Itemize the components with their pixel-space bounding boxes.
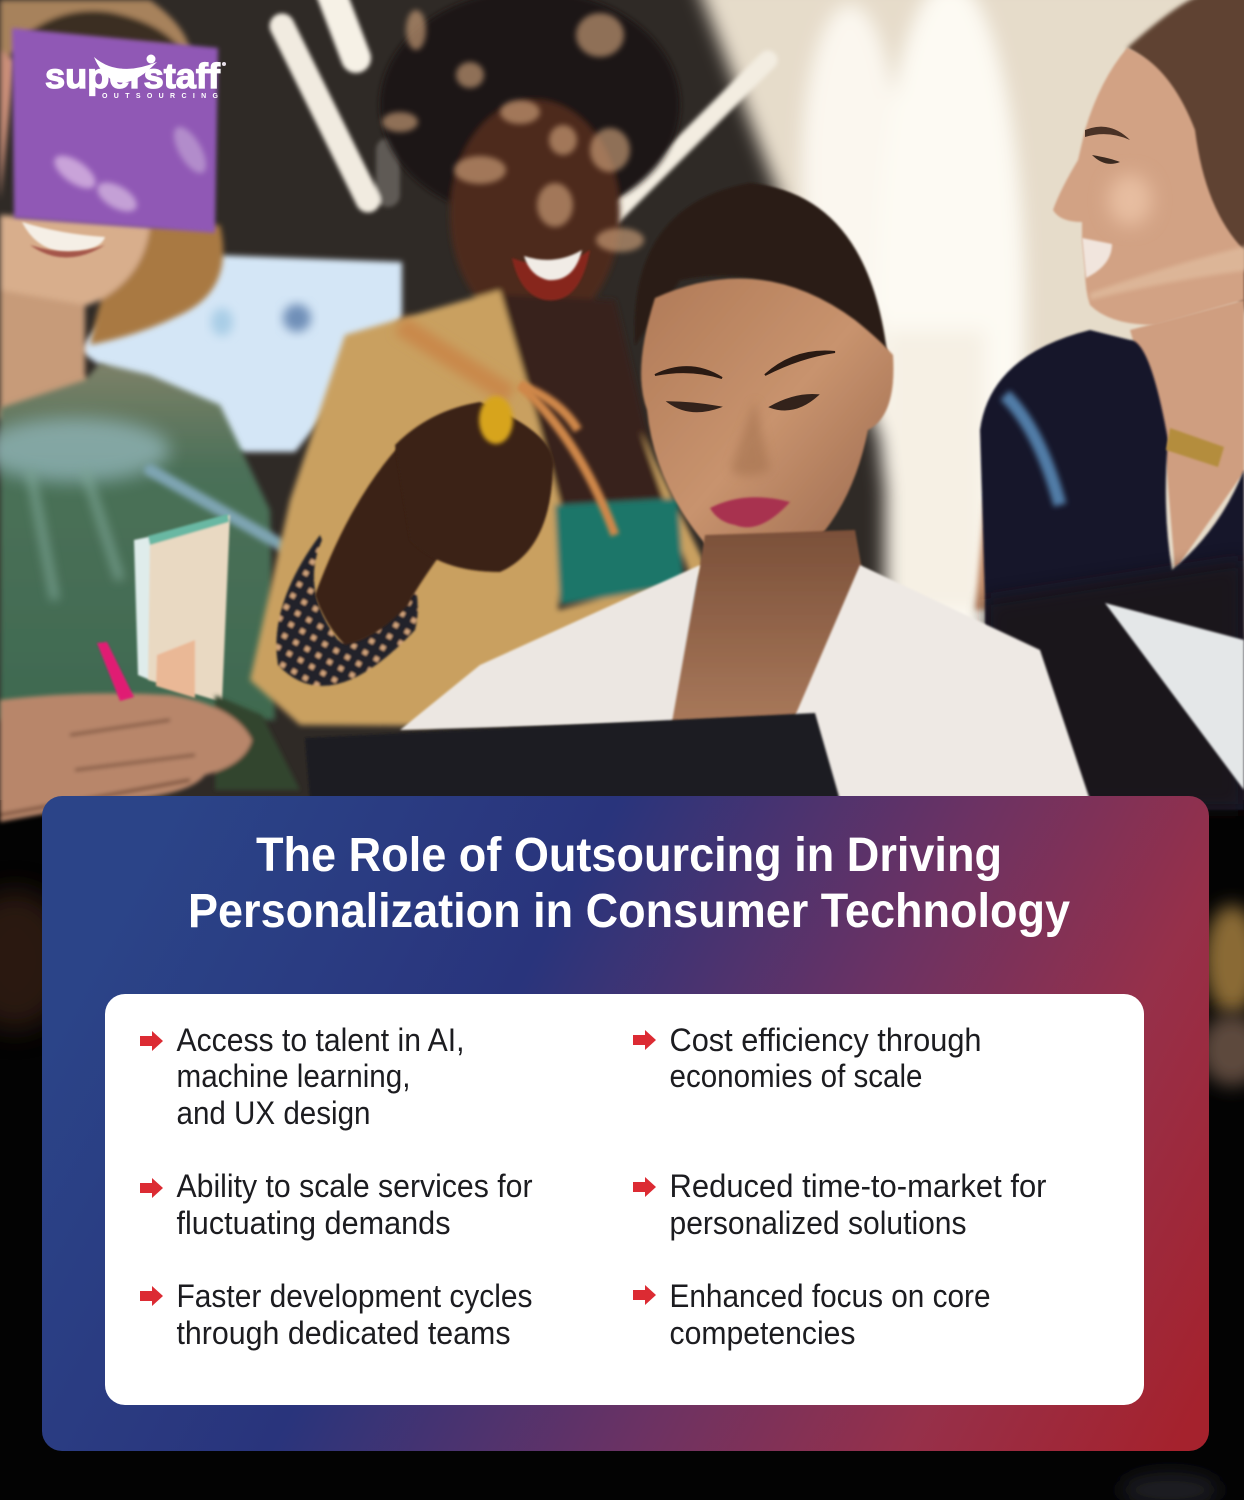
icon: patterned cuff xyxy=(276,535,418,686)
ceiling light streaks xyxy=(282,0,768,216)
benefit: reduced time-to-market: Reduced time-to-market for xyxy=(670,1168,1047,1204)
person: left woman xyxy=(0,0,325,822)
benefit: enhanced focus: Enhanced focus on core xyxy=(670,1278,990,1314)
benefit: access to talent: and UX design xyxy=(176,1095,370,1131)
benefit: faster development: through dedicated teams xyxy=(176,1315,510,1351)
benefit: ability to scale: Ability to scale services for xyxy=(176,1168,533,1204)
title: Personalization in Consumer Technology xyxy=(188,885,1070,938)
logo: superstaff outsourcing: superstaff xyxy=(45,57,220,96)
icon: purple sticky note xyxy=(12,28,218,233)
benefit: cost efficiency: economies of scale xyxy=(670,1058,922,1094)
benefit: cost efficiency: Cost efficiency through xyxy=(670,1022,982,1058)
panel: gradient background xyxy=(42,796,1209,1451)
benefit: faster development xyxy=(140,1278,532,1351)
benefit: cost efficiency xyxy=(633,1022,982,1094)
icon: tablet xyxy=(305,713,840,800)
benefit: reduced time-to-market xyxy=(633,1168,1047,1241)
benefit: access to talent: machine learning, xyxy=(176,1058,410,1094)
benefit: access to talent: Access to talent in AI, xyxy=(176,1022,464,1058)
benefit: faster development: Faster development cycles xyxy=(176,1278,532,1314)
benefit: access to talent xyxy=(140,1022,464,1131)
lower photo tones beside panel xyxy=(0,890,1244,1500)
panel: white benefits card xyxy=(105,994,1144,1405)
person: middle woman xyxy=(250,0,708,726)
benefit: ability to scale xyxy=(140,1168,533,1241)
background screen xyxy=(78,255,402,452)
benefit: ability to scale: fluctuating demands xyxy=(176,1205,450,1241)
logo: superstaff outsourcing: OUTSOURCING xyxy=(102,93,219,100)
back wall xyxy=(695,0,1244,660)
benefit: reduced time-to-market: personalized solutions xyxy=(670,1205,966,1241)
title: The Role of Outsourcing in Driving xyxy=(256,829,1002,882)
title xyxy=(188,829,1070,938)
person: center woman xyxy=(305,183,1090,800)
benefit: enhanced focus xyxy=(633,1278,990,1351)
icon: notebook xyxy=(134,514,230,702)
dark dress xyxy=(980,330,1244,810)
person: right woman xyxy=(975,0,1244,810)
benefit: enhanced focus: competencies xyxy=(670,1315,856,1351)
